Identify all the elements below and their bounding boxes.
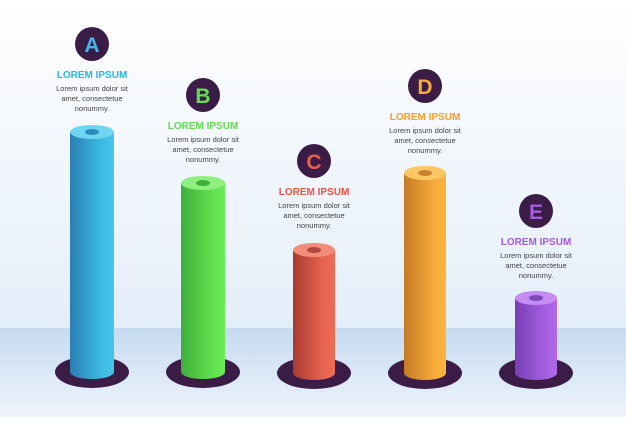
bar C [277,243,351,389]
label B: nonummy. [186,155,220,164]
bar B [166,176,240,388]
label D: nonummy. [408,146,442,155]
label B: Lorem ipsum dolor sit [167,135,240,144]
label B: B [195,85,211,108]
label D [389,69,462,155]
bar D [388,166,462,389]
label C: Lorem ipsum dolor sit [278,201,351,210]
label D: LOREM IPSUM [390,112,460,123]
label E: Lorem ipsum dolor sit [500,251,573,260]
label B: LOREM IPSUM [168,121,238,132]
label D: D [417,76,433,99]
label A: LOREM IPSUM [57,70,127,81]
label C: nonummy. [297,221,331,230]
label A: nonummy. [75,104,109,113]
label A [56,27,129,113]
bar E [499,291,573,389]
label C: C [306,151,322,174]
label C: amet, consectetue [283,211,345,220]
label E: LOREM IPSUM [501,237,571,248]
label B [167,78,240,164]
label B: amet, consectetue [172,145,234,154]
label A: amet, consectetue [61,94,123,103]
bar A [55,125,129,388]
label C: LOREM IPSUM [279,187,349,198]
label D: amet, consectetue [394,136,456,145]
label A: A [84,34,100,57]
label E: amet, consectetue [505,261,567,270]
label E: nonummy. [519,271,553,280]
label E [500,194,573,280]
label C [278,144,351,230]
label A: Lorem ipsum dolor sit [56,84,129,93]
label D: Lorem ipsum dolor sit [389,126,462,135]
label E: E [529,201,543,224]
